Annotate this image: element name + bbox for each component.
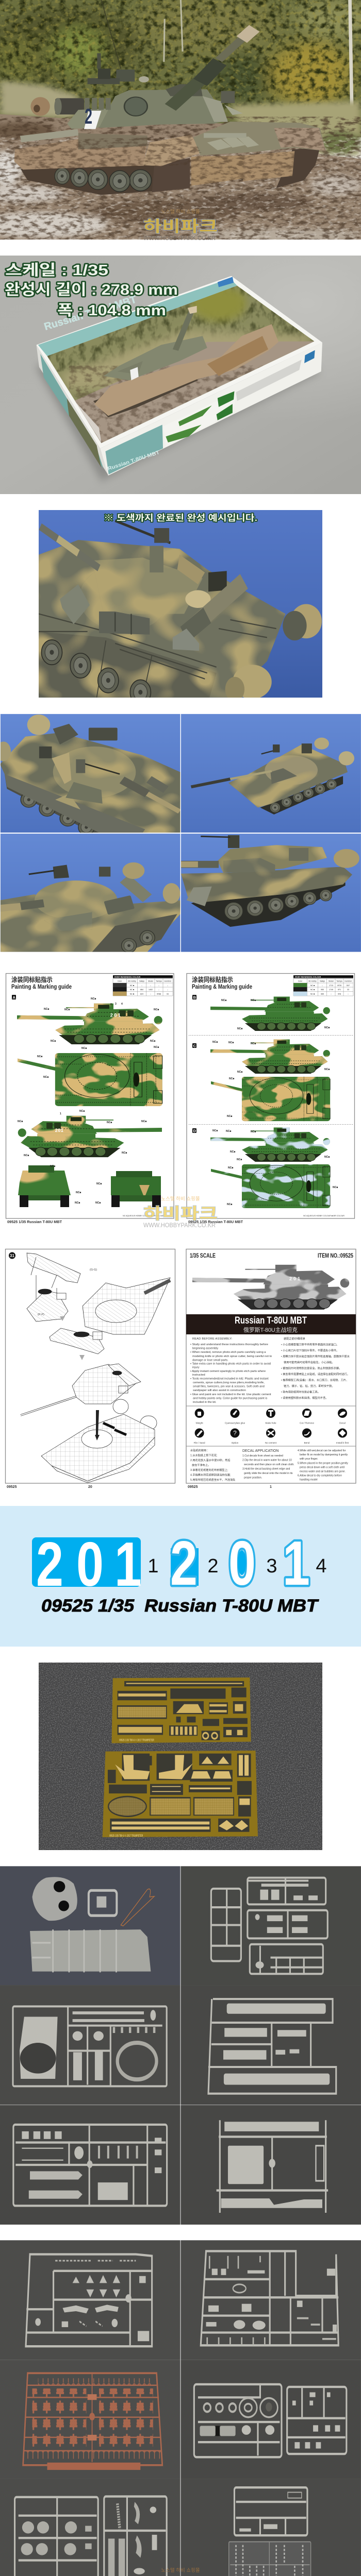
colour callouts: NC■ (50, 1165, 55, 1168)
decal notes english: with your finger. (300, 1458, 318, 1461)
chinese notes: 使用可能弯曲可动零件会粘住。小心涂粘。 (284, 1360, 335, 1364)
paint reference table: Humbrol (344, 980, 352, 982)
panel: painting and marking guide A (5, 973, 174, 1224)
panel: kit box on grey background with scale and dimensions (0, 256, 361, 494)
cell: copper colour track sprue (0, 2360, 180, 2479)
decal notes english: 1.Cut decals from sheet as needed (242, 1454, 283, 1458)
paint reference table: NC ■ (130, 989, 134, 991)
decal notes english: seconds and then place on soft clean cloth. (244, 1463, 294, 1466)
tank A: top view (18, 1053, 162, 1106)
paint reference table: – (141, 985, 142, 987)
decal notes chinese (190, 1448, 236, 1482)
box lid title: Russian T-80U MBT (43, 294, 138, 333)
read before assembly: instructed (192, 1374, 205, 1377)
paint reference table: PAINT REFERENCE COLOUR (114, 976, 141, 978)
paint reference table: 1713 (329, 985, 333, 987)
paint reference table: 51F (347, 985, 350, 987)
scale and item number: 1/35 SCALE (190, 1252, 216, 1259)
heading (192, 976, 252, 1133)
paint reference table (113, 975, 173, 996)
turret number 201: 201 (289, 1276, 302, 1281)
chinese notes (281, 1336, 350, 1400)
colour callouts: NC■ (221, 999, 226, 1002)
scale and size text: 스케일 : 1/35 (5, 262, 108, 279)
heading (11, 976, 72, 999)
photo: gun and turret from front left (0, 834, 180, 953)
paint reference table: 965 (321, 993, 324, 995)
sheet frame (186, 1249, 356, 1483)
paint reference table: Model (148, 980, 153, 982)
kit box (35, 276, 322, 481)
watermark: hobby park logo on hero photo: 노스탤 하비 쇼핑몰 (161, 209, 200, 215)
read before assembly: modeling knife or photo etch sprue cutter, being careful not to (192, 1355, 272, 1358)
chinese notes: • 用瞬力快干胶水粘合蚀刻片零件和金属轴。赶脆快干胶水 (281, 1354, 350, 1358)
paint reference table: XF88 (157, 993, 161, 995)
colour callouts: NC■ (228, 1041, 234, 1044)
chinese notes: • 小心用刀片切下蚀刻片零件。不要遗失小零件。 (281, 1348, 339, 1352)
scale and size text: 폭 : 104.8 mm (57, 302, 166, 319)
heading: 涂装同标贴指示 (192, 976, 233, 984)
cell: turret shell, hull bottom and copper wire (0, 1866, 180, 1985)
decal notes chinese: 1.从水贴纸上剪下花花; (190, 1453, 217, 1457)
decal: separate digits: 0 (228, 1529, 256, 1599)
decal notes english (242, 1449, 348, 1482)
symbols legend captions (194, 1422, 349, 1444)
decal: 201 on blue plate: 0 (76, 1530, 104, 1600)
chinese notes: • 软布用砂纸同时也是必备工具。 (281, 1390, 320, 1394)
colour callouts: NC■ (230, 1150, 235, 1154)
watermark: hobby park logo between guide sheets: 노스탤 하비 쇼핑몰 (161, 1196, 200, 1202)
mud ground (0, 114, 361, 242)
colour callouts: NC■ (237, 1071, 242, 1074)
footer: 09525 (7, 1485, 17, 1489)
chinese notes: • 小心用模型锯刀除平所有零件表面的注射溢口。 (281, 1343, 339, 1347)
read before assembly: • Apply instant cement sparingly to photo etch parts where (190, 1370, 266, 1373)
decal notes chinese: 2.用花花放入温水中浸10秒。然后 (190, 1458, 231, 1462)
brass sheet A: 09525 1/35 T80-U © 2017 TRUMPETER (119, 1738, 154, 1742)
photo: painted model on blue background (39, 510, 322, 698)
paint reference table: Tamiya (336, 980, 342, 982)
arrows between steps (60, 1316, 85, 1360)
paint reference table: – (150, 985, 151, 987)
legend: NC AQUEOUS HOBBY COLOUR ■ MR COLOUR (123, 1215, 164, 1217)
title band: 俄罗斯T-80U主战坦克 (243, 1326, 298, 1333)
paint reference table: Humbrol (164, 980, 171, 982)
colour callouts: NC■ (333, 1186, 338, 1189)
chinese notes: 锉刀、镊子、钻、钻、剪刀、即时快干胶。 (284, 1384, 335, 1388)
symbols legend captions: Cut / Remove (300, 1422, 314, 1424)
colour callouts: NC■ (141, 1120, 146, 1123)
paint reference table: Vallejo (320, 980, 325, 982)
colour callouts: NC■ (251, 1130, 256, 1133)
tank D: top view, winter (211, 1164, 330, 1208)
side number 201: 201 (55, 1128, 63, 1133)
read before assembly: included in the kit. (193, 1401, 217, 1404)
hull with road wheels (41, 1399, 157, 1483)
read before assembly: • Take extra care in handling photo etch parts in order to avoid (190, 1362, 271, 1365)
colour callouts: NC■ (251, 1042, 256, 1045)
symbols legend captions: Option (232, 1442, 239, 1444)
symbols legend captions: Bend (304, 1442, 310, 1444)
cell: sprue with deck plate (180, 2105, 361, 2225)
heading: 涂装同标贴指示 (11, 976, 53, 984)
tank C: top view (211, 1077, 330, 1121)
footer code: 09525 1/35 Russian T-80U MBT (7, 1221, 62, 1224)
decal: 201 on blue plate: 2 (36, 1530, 63, 1600)
tank A: rear view (111, 1171, 161, 1207)
paint reference table: NC ■ (130, 985, 134, 987)
colour callouts: NC■ (43, 1076, 48, 1079)
cell: long hull side panels sprue (180, 1985, 361, 2105)
decal numbering: 3 (266, 1555, 277, 1577)
chinese notes: • 某些零件需要喷贴上水贴纸。请选择在装配的同时进行。 (281, 1372, 350, 1376)
colour callouts (212, 999, 338, 1206)
step number: 31 (10, 1253, 14, 1258)
panel: painting and marking guide B C D (186, 973, 355, 1224)
heading: D (193, 1128, 196, 1133)
panel: decal sheet band (0, 1506, 361, 1647)
colour callouts: NC■ (24, 1154, 29, 1157)
chinese notes: • 推荐模型工具(自备)：胶水、水口剪刀、长咀钳、刀片、 (281, 1378, 349, 1382)
cell: wheels and fuel drums sprue (180, 2360, 361, 2479)
colour callouts: NC■ (154, 1046, 159, 1049)
decal notes chinese: 放在干净布上。 (192, 1463, 210, 1467)
colour callouts: NC■ (37, 1055, 42, 1058)
heading: C (193, 1044, 196, 1048)
paint reference table: XF1 (338, 989, 341, 991)
decal: 201 on blue plate (32, 1530, 142, 1600)
watermark: hobby park logo on hero photo: WWW.HOBBYPARK.CO.KR (143, 235, 216, 242)
decal numbering: 4 (316, 1555, 327, 1577)
panel: sprue photo grid two (0, 2240, 361, 2576)
paint reference table: XF20 (337, 985, 341, 987)
read before assembly: READ BEFORE ASSEMBLY: (192, 1337, 233, 1341)
read before assembly: • Tools recommended(not included in kit): Plastic and instant (190, 1378, 269, 1381)
read before assembly: sandpaper will also assist in construction (193, 1389, 246, 1392)
paint reference table: NC ■ (310, 989, 315, 991)
decal notes chinese: 5.用软布轻压花纸直至水干。汽泡消失 (190, 1478, 236, 1482)
paint reference table: NC ■ (310, 993, 315, 995)
assembly arrow (95, 1410, 100, 1440)
sheet frame (187, 974, 355, 1218)
panel: assembly step 31 line drawing: (G-G) (90, 1268, 97, 1272)
tank A: right side view (18, 1116, 162, 1157)
photo grid: four views of painted model (0, 714, 361, 952)
cell: stowage bin sprue (0, 2240, 180, 2360)
decal notes english: DECAL APPLICATION (242, 1449, 278, 1453)
watermark: hobby park logo between guide sheets: 하비파크 (143, 1205, 218, 1223)
paint reference table: 1749 (329, 989, 333, 991)
cell: sprue with armour panels (0, 2105, 180, 2225)
read before assembly: and hobby paints only. Color guide for purchasing paint is (193, 1397, 268, 1400)
paint reference table: Model (329, 980, 334, 982)
cell: small sprue and clear sprue (180, 2479, 361, 2576)
chinese notes: • 请使用塑料胶水和油漆。模型内不含。 (281, 1396, 328, 1400)
fuel tube with rack (50, 1328, 104, 1354)
symbols legend icons: ? (233, 1429, 237, 1436)
brass sheet B: 09525 1/35 T80-U © 2017 TRUMPETER (109, 1834, 143, 1838)
read before assembly: injury (192, 1366, 200, 1369)
paint reference table: Mr.Hobby (308, 980, 317, 982)
box side title: Russian T-80U MBT (107, 450, 160, 472)
paint reference table: 33 (347, 989, 349, 991)
colour callouts: NC■ (237, 1027, 242, 1030)
decal: separate digits: 2 (170, 1529, 198, 1599)
colour callouts: NC■ (226, 1130, 231, 1133)
heading: Painting & Marking guide (11, 984, 72, 990)
read before assembly: damage or lose small parts. (192, 1359, 228, 1362)
camouflaged tank (39, 521, 322, 705)
colour callouts: NC■ (227, 1203, 232, 1206)
colour callouts: NC■ (212, 1041, 218, 1044)
decal: 201 on blue plate: 1 (114, 1530, 142, 1600)
paint reference table: PAINT REFERENCE COLOUR (295, 976, 321, 978)
tank C: side view (210, 1039, 330, 1074)
decal notes english: 2.Dip the decal in warm water for about 10 (242, 1459, 292, 1462)
colour callouts: NC■ (76, 1191, 81, 1194)
paint reference table: – (158, 985, 159, 987)
tank B: side view, solid green (210, 996, 330, 1031)
forest background (0, 0, 361, 138)
symbols legend captions: Install it first (336, 1442, 349, 1444)
colour callouts: NC■ (64, 1008, 70, 1011)
exploded part: snorkel tube (27, 1253, 80, 1314)
colour callouts: 4 (121, 1003, 123, 1006)
paint reference table: Mr.Hobby (128, 980, 136, 982)
tank (14, 28, 327, 195)
paint reference table: – (167, 985, 168, 987)
decal notes english: press decal down with a soft cloth until (300, 1466, 344, 1469)
paint reference table: NC ■ (310, 985, 315, 987)
symbols legend captions: Cyanoacrylate glue (225, 1422, 245, 1424)
paint reference table: – (331, 993, 332, 995)
colour callouts: NC■ (44, 1008, 49, 1011)
colour callouts: NC■ (122, 1151, 127, 1155)
colour callouts (18, 997, 159, 1205)
read before assembly: cements, sprue cutters,long nose pliers,modeling knife, (193, 1381, 265, 1384)
decal: separate digits: 1 (283, 1529, 310, 1599)
paint reference table: Color (118, 980, 122, 982)
chinese notes: 装配之前仔细阅读 (284, 1336, 305, 1341)
title band: Russian T-80U MBT (235, 1315, 307, 1326)
brass sheet B (103, 1751, 258, 1838)
colour callouts: NC■ (212, 1129, 218, 1132)
heading: B (193, 995, 196, 999)
symbols legend captions: Make hole (265, 1422, 276, 1424)
read before assembly: beginning assembly (192, 1347, 218, 1350)
footer: 20 (88, 1485, 92, 1489)
turret subassembly with gun (21, 1364, 141, 1415)
read before assembly (190, 1337, 272, 1404)
hero photo: T-80U tank driving through mud (0, 0, 361, 240)
colour callouts: 2 (110, 1003, 112, 1006)
decal: separate digits (170, 1529, 310, 1599)
sheet frame (5, 1249, 175, 1483)
exploded part: mount (27, 1289, 68, 1321)
decal notes english: handling model (300, 1479, 318, 1482)
heading: Painting & Marking guide (192, 984, 252, 990)
decal numbering: 2 (207, 1555, 219, 1577)
colour callouts: NC■ (95, 1201, 101, 1205)
colour callouts: NC■ (229, 1077, 234, 1080)
decal notes english: 3.Hold the decal backing sheet edge and (242, 1467, 290, 1470)
watermark: hobby park logo on sprue photo: 노스탤 하비 쇼핑몰 (161, 2567, 200, 2573)
decal title: 09525 1/35 Russian T-80U MBT (41, 1596, 319, 1616)
read before assembly: small files, tweezers, pin vise & scissors. Soft cloth and (193, 1385, 265, 1388)
paint reference table: 950 (321, 989, 324, 991)
photo: three-quarter view with long gun (181, 714, 361, 833)
step number (9, 1252, 15, 1259)
colour callouts: NC■ (18, 1120, 23, 1123)
decal notes english: 5.When placed in the proper position,gently (298, 1462, 348, 1465)
heading: A (12, 995, 15, 999)
read before assembly: • When needed, remove photo-etch parts carefully using a (190, 1351, 266, 1354)
paint reference table: 1402 (149, 989, 153, 991)
tank D: side view, winter (210, 1127, 330, 1162)
photo: photo-etch brass sheets on dark mat (39, 1663, 322, 1850)
colour callouts: NC■ (324, 1156, 330, 1159)
decal notes english: better fit on model by dampening it gently (300, 1453, 348, 1456)
turret number 201: 201 (110, 1013, 122, 1018)
symbols legend icons (195, 1409, 347, 1437)
colour callouts: NC■ (91, 997, 96, 1001)
tank A: front view (18, 1165, 71, 1207)
paint reference table: NC ■ (130, 993, 134, 995)
watermark: hobby park logo on sprue photo (143, 2567, 218, 2576)
paint reference table: 864 (140, 989, 143, 991)
colour callouts: NC■ (96, 1182, 102, 1185)
cell: road wheels sprue (0, 2479, 180, 2576)
colour callouts: 3 (115, 1003, 117, 1006)
photo: side view with road wheels (181, 834, 361, 952)
cell: four small sprues (180, 1866, 361, 1985)
dry grass (0, 81, 361, 156)
turret assembly top (83, 1278, 170, 1334)
cell: many small parts sprue (180, 2240, 361, 2360)
read before assembly: • Study and understand these instructions thoroughly before (190, 1343, 268, 1346)
part code: (P-P) (38, 1313, 44, 1316)
decal notes english: 6.Allow decal to dry completely before (298, 1475, 342, 1478)
decal notes english: proper position. (244, 1477, 262, 1480)
scale and size text: 완성시 길이 : 278.9 mm (5, 281, 178, 298)
read before assembly: • Glue and paint are not included in the kit. Use plastic cement (190, 1393, 271, 1396)
symbols legend captions: No cement (265, 1442, 277, 1444)
paint reference table: 93 (167, 993, 169, 995)
sheet frame (6, 974, 174, 1218)
colour callouts: NC■ (251, 999, 256, 1002)
colour callouts: NC■ (107, 1121, 112, 1124)
grey tank side view (192, 1265, 349, 1310)
watermark: hobby park logo on hero photo: 하비파크 (143, 217, 218, 235)
colour callouts: NC■ (51, 1040, 56, 1043)
chinese notes: • 留蚀刻片时须特别注意安全。防止利锐割伤手脚。 (281, 1366, 341, 1370)
decal numbering: 1 (147, 1555, 159, 1577)
colour callouts: NC■ (79, 1110, 85, 1113)
decal numbering (147, 1555, 327, 1577)
paint reference table (293, 975, 353, 996)
colour callouts: NC■ (228, 1166, 233, 1170)
footer: 1 (270, 1485, 272, 1489)
symbols legend captions: Decal (339, 1422, 346, 1424)
paint reference table: Vallejo (139, 980, 144, 982)
decal notes english: 4.While still wet,decal can be adjusted for (298, 1449, 346, 1452)
watermark: hobby park logo on hero photo (143, 209, 218, 242)
title band (186, 1314, 356, 1334)
colour callouts: NC■ (75, 1201, 80, 1205)
paint reference table: Color (298, 980, 303, 982)
footer (7, 1485, 92, 1489)
scale and size text (5, 262, 178, 319)
tank A: left side view (17, 1004, 162, 1044)
decal notes english: excess water and air bubbles are gone. (300, 1470, 346, 1473)
paint reference table: – (150, 993, 151, 995)
symbols legend captions: File / Sand (194, 1442, 205, 1444)
caption: ※ 도색까지 완료된 완성 예시입니다. (104, 513, 257, 523)
footer: 09525 (188, 1485, 198, 1489)
colour callouts: NC■ (324, 1026, 330, 1029)
colour callouts: NC■ (227, 1115, 232, 1118)
colour callouts: NC■ (154, 1008, 159, 1011)
colour callouts: NC■ (237, 1158, 242, 1161)
decal notes chinese: 4.手指蘸水将花纸移到适当的位置; (190, 1472, 231, 1477)
cell: upper hull sprue (0, 1985, 180, 2105)
watermark: hobby park logo between guide sheets: WWW.HOBBYPARK.CO.KR (143, 1223, 216, 1229)
colour callouts: NC■ (324, 1068, 330, 1071)
paint reference table: 824 (140, 993, 143, 995)
colour callouts: 1 (60, 1112, 61, 1115)
footer (188, 1485, 272, 1489)
photo: top view from rear (0, 714, 180, 835)
scale and item number (190, 1252, 353, 1259)
panel: instruction cover page (186, 1249, 356, 1489)
paint reference table: – (322, 985, 323, 987)
brass sheet A (112, 1677, 251, 1743)
panel: assembly step 31 line drawing (5, 1249, 175, 1489)
symbols legend captions: Weight (195, 1422, 203, 1424)
legend: NC AQUEOUS HOBBY COLOUR ■ MR COLOUR (303, 1215, 344, 1217)
colour callouts: NC■ (150, 1040, 155, 1043)
tank number plate digit: 2 (85, 105, 92, 129)
panel: sprue photo grid one (0, 1866, 361, 2225)
paint reference table: – (167, 989, 168, 991)
paint reference table: Tamiya (156, 980, 162, 982)
decal notes chinese: 水贴纸的使用： (190, 1448, 209, 1452)
watermark: hobby park logo between guide sheets (143, 1196, 218, 1229)
paint reference table: – (158, 989, 159, 991)
colour callouts: NC■ (81, 1047, 87, 1050)
decal notes chinese: 3.拿着花花纸推向花布到模型上; (190, 1468, 228, 1472)
paint reference table: XF8 (338, 993, 341, 995)
decal notes english: gently slide the decal onto the model in its (244, 1472, 293, 1475)
paint reference table: – (348, 993, 349, 995)
footer code: 09525 1/35 Russian T-80U MBT (188, 1221, 243, 1224)
